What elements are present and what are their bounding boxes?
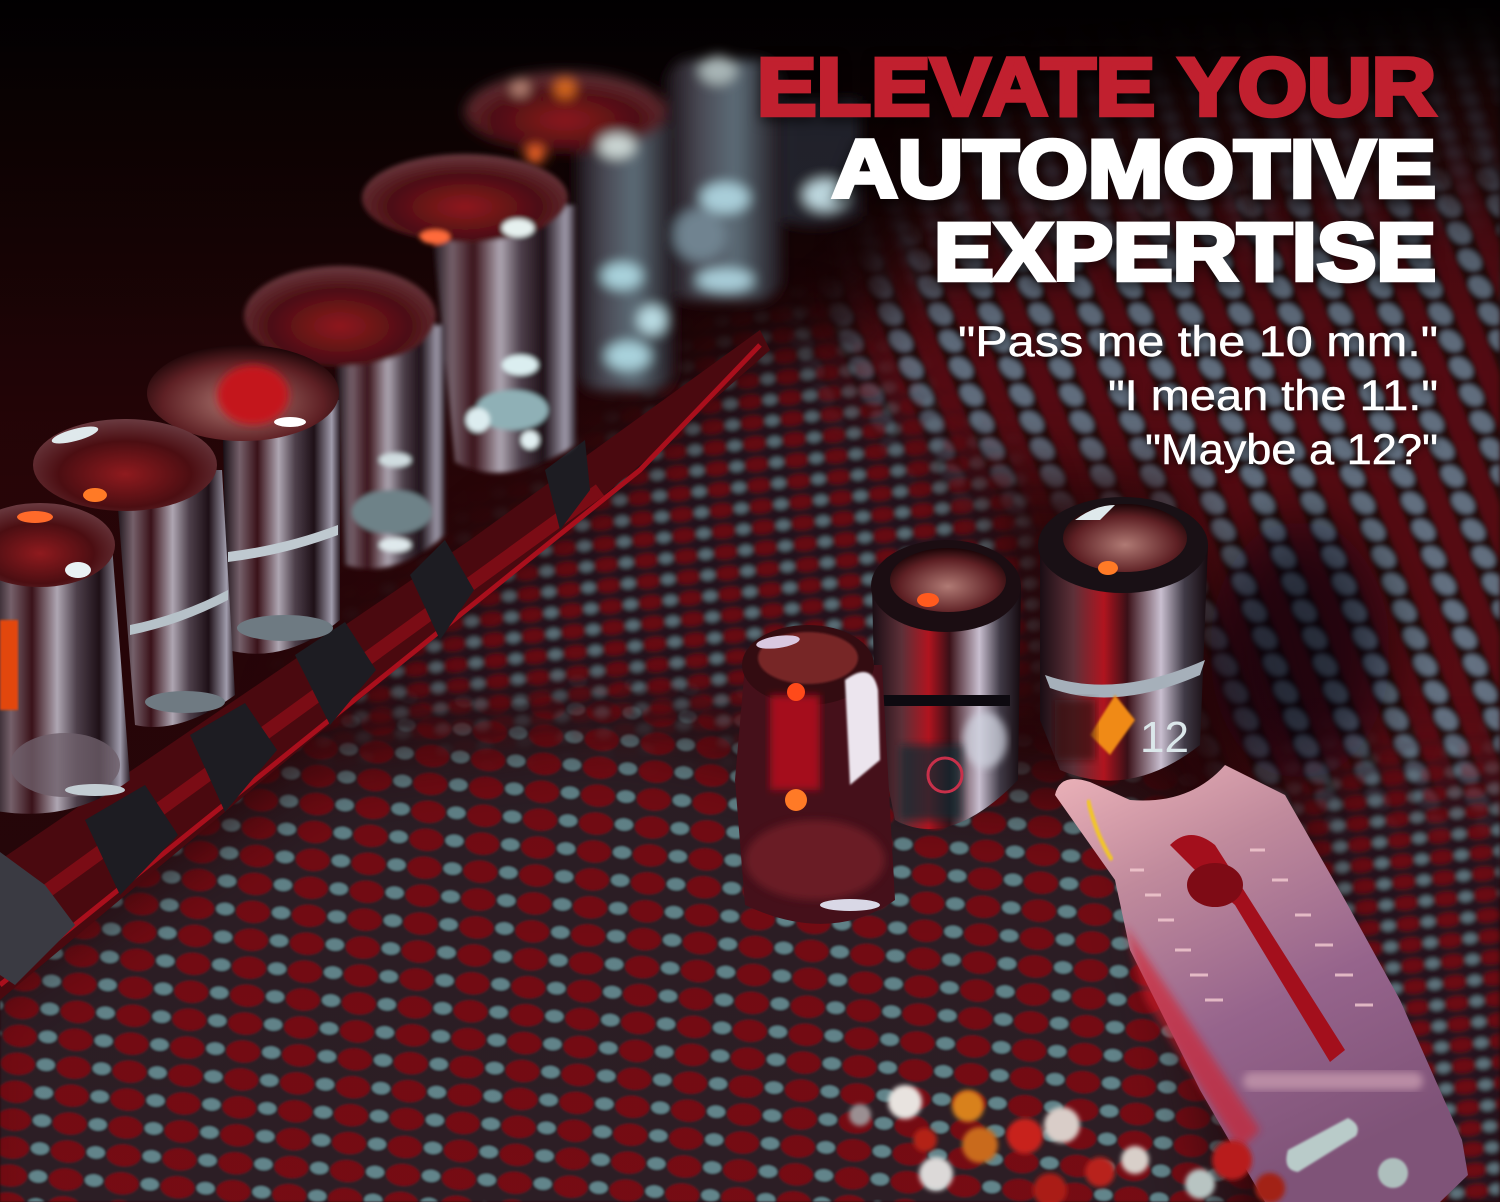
quote line 1: "Pass me the 10 mm." [958, 318, 1438, 366]
headline line 3: EXPERTISE [934, 207, 1436, 298]
mat: middle red and gray dots [319, 308, 1040, 754]
socket 3 [147, 345, 340, 654]
socket: 11 mm middle [871, 540, 1021, 829]
socket 2 [33, 419, 235, 727]
wrench blurred engraving [1243, 1072, 1423, 1090]
wrench scale marks [1130, 850, 1373, 1005]
mat: far upper-right weave [868, 46, 1500, 299]
socket: 12 mm front: 12 [1140, 713, 1189, 762]
socket: 12 mm front [1038, 497, 1208, 781]
mat: shadow near front sockets [1210, 520, 1390, 780]
quote line 2: "I mean the 11." [1108, 372, 1438, 420]
wrench bottom notch [1286, 1118, 1408, 1188]
bokeh highlights at the bottom [849, 1085, 1285, 1202]
gauge wrench [1055, 765, 1468, 1202]
socket row: mid sockets [244, 154, 576, 569]
socket: 10 mm front-left [735, 625, 895, 924]
socket row: far blurred sockets [465, 56, 860, 390]
mat: lower-right dots [1286, 737, 1500, 1202]
socket row: near sockets [0, 345, 340, 814]
headline line 1: ELEVATE YOUR [757, 42, 1436, 133]
socket 1 [0, 503, 130, 814]
socket 4 [244, 266, 445, 569]
red socket rail [0, 330, 770, 1000]
socket 5 [362, 154, 576, 473]
mat: near lower-left red and teal dots [0, 677, 1258, 1202]
mat: right side blue-gray dots [794, 146, 1500, 862]
quote line 3: "Maybe a 12?" [1145, 426, 1438, 474]
headline line 2: AUTOMOTIVE [832, 124, 1436, 215]
rail clips [0, 440, 590, 985]
wrench slot [1170, 835, 1345, 1062]
wrench yellow reflection [1088, 800, 1112, 860]
headline [757, 42, 1436, 298]
quote text block [958, 318, 1438, 474]
